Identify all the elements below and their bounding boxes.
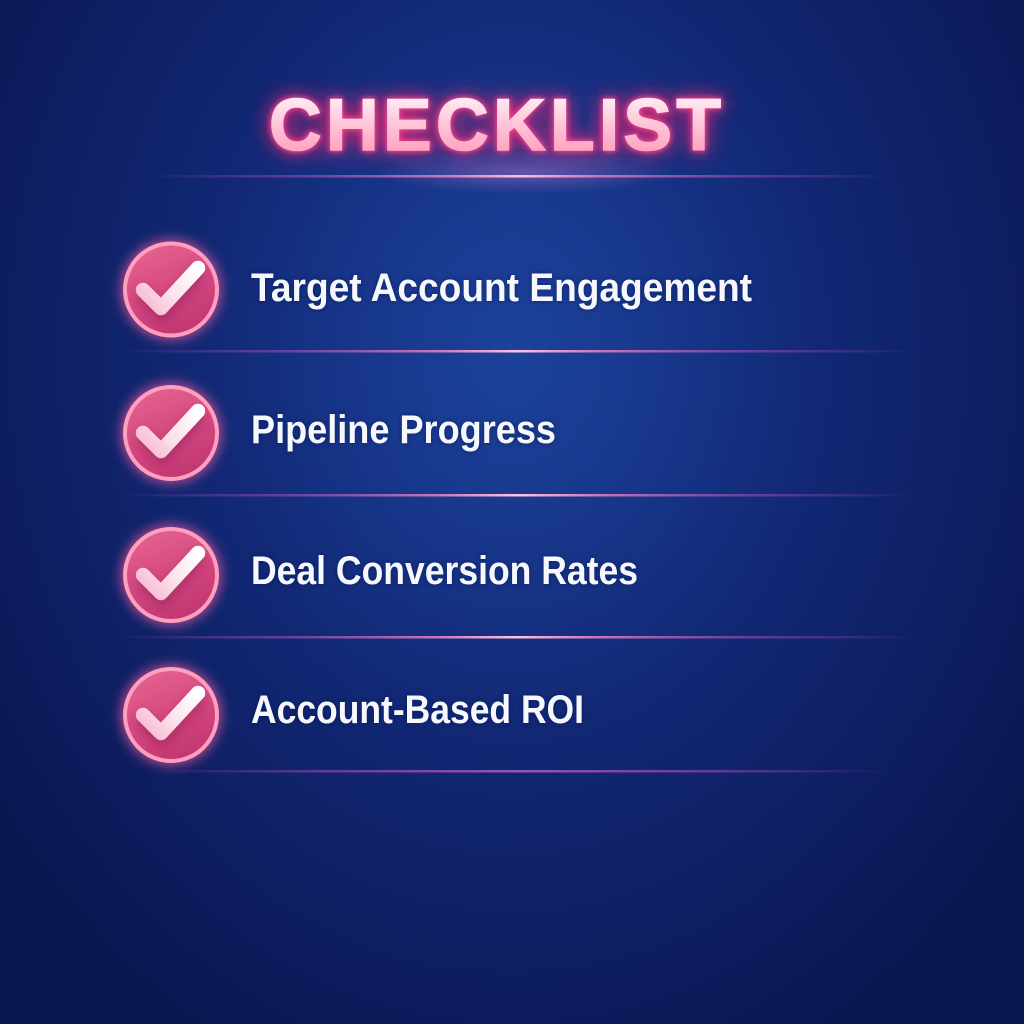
- checklist item 2: [121, 383, 556, 483]
- label: Deal Conversion Rates: Deal Conversion Rates: [251, 549, 638, 593]
- checklist item 3: [121, 525, 638, 625]
- label: Target Account Engagement: Target Account Engagement: [251, 266, 752, 310]
- divider: item 1: [120, 350, 915, 352]
- divider: item 2: [120, 494, 915, 496]
- label: Pipeline Progress: Pipeline Progress: [251, 408, 556, 452]
- label: Account-Based ROI: Account-Based ROI: [251, 688, 584, 732]
- icon: check badge 3: [121, 525, 221, 625]
- icon: check badge 4: [121, 665, 221, 765]
- title: CHECKLIST: [269, 85, 721, 166]
- label: Deal Conversion Rates: Deal Conversion Rates: [251, 549, 638, 593]
- checklist item 1: [121, 240, 752, 340]
- title: CHECKLIST: [269, 85, 721, 166]
- divider: under title: [150, 150, 890, 194]
- label: Account-Based ROI: Account-Based ROI: [251, 688, 584, 732]
- label: Pipeline Progress: Pipeline Progress: [251, 408, 556, 452]
- divider: item 4: [150, 770, 890, 772]
- checklist item 4: [121, 665, 584, 765]
- icon: check badge 1: [121, 240, 221, 340]
- divider: item 3: [115, 636, 915, 638]
- label: Target Account Engagement: Target Account Engagement: [251, 266, 752, 310]
- title: CHECKLIST: [269, 85, 721, 166]
- icon: check badge 2: [121, 383, 221, 483]
